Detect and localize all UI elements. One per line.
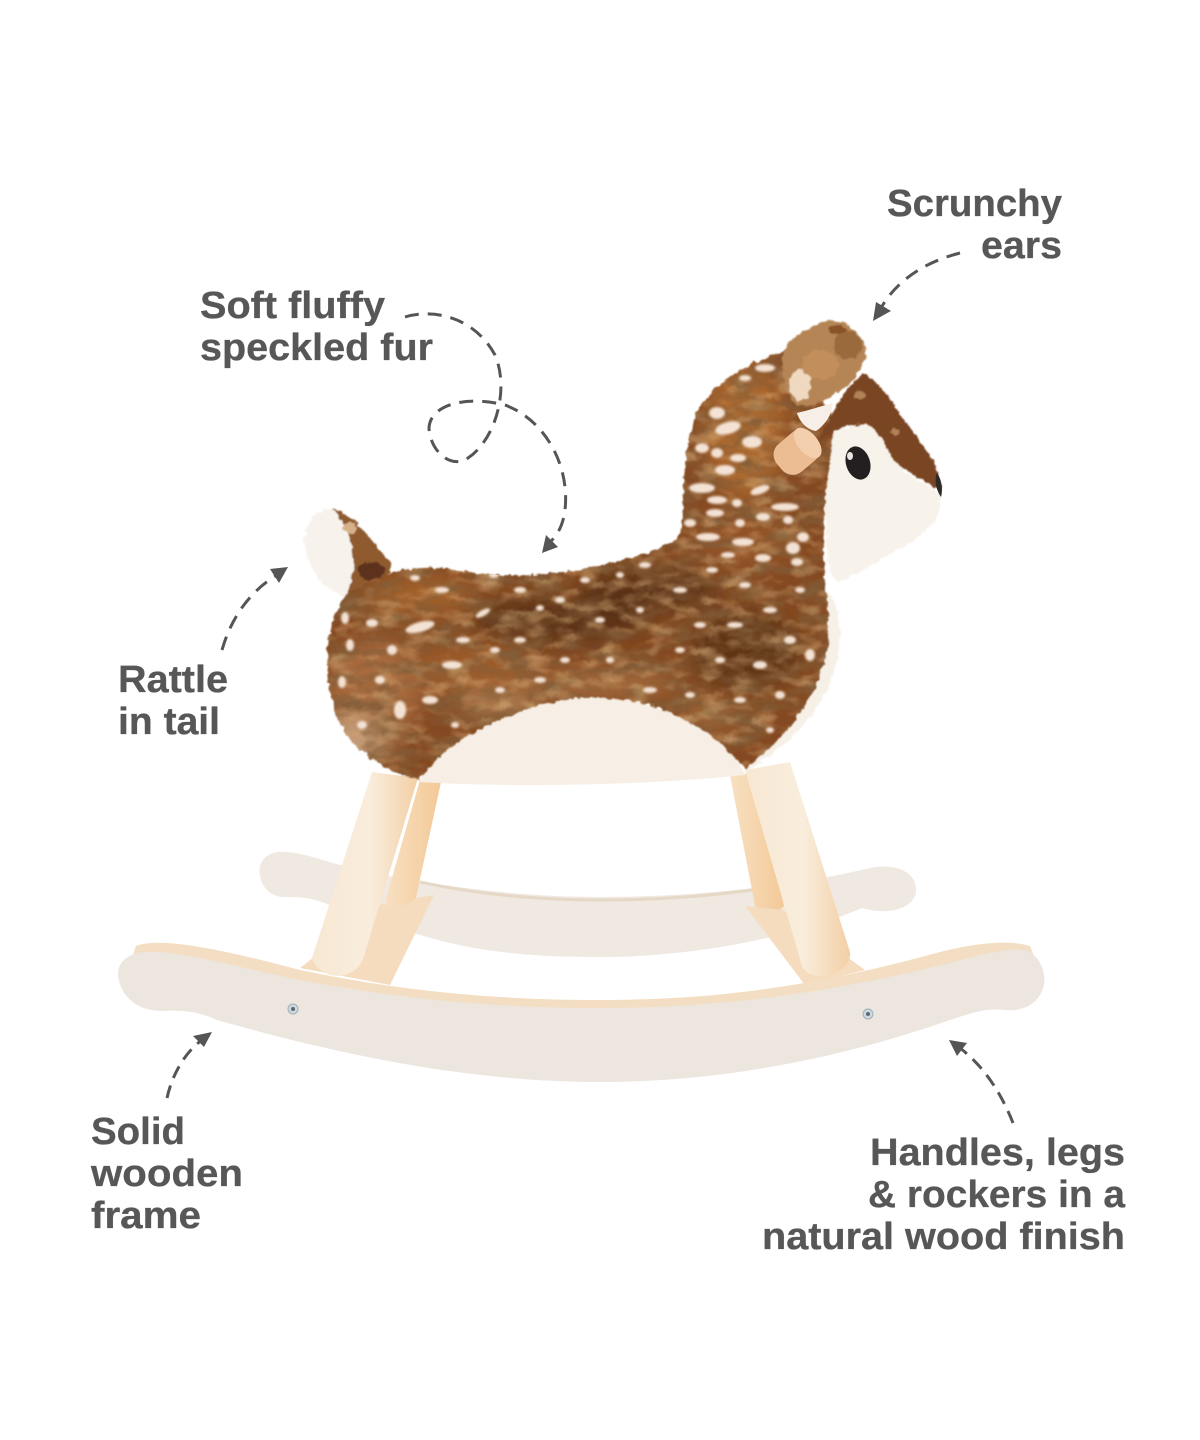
nose — [936, 473, 942, 497]
belly — [420, 697, 745, 785]
label: soft fluffy fur: Soft fluffy — [200, 285, 385, 327]
arrow: rattle in tail — [222, 567, 288, 650]
tail — [305, 509, 392, 597]
product: rocking deer — [118, 320, 1044, 1082]
arrow: handles legs rockers — [949, 1040, 1013, 1123]
label: solid wooden frame: Solid — [91, 1111, 185, 1153]
speckles — [338, 364, 815, 733]
label: scrunchy ears — [887, 183, 1062, 267]
inner ear white — [797, 403, 833, 431]
label: handles legs rockers — [762, 1132, 1126, 1258]
wooden handle — [768, 423, 827, 481]
deer head — [768, 320, 942, 497]
mottling — [310, 360, 800, 765]
ear — [783, 320, 867, 405]
back legs — [385, 773, 784, 912]
label: solid wooden frame: wooden — [90, 1153, 243, 1195]
label: soft fluffy fur — [200, 285, 433, 369]
fur streaks — [320, 340, 840, 790]
label: solid wooden frame: frame — [91, 1195, 201, 1237]
front legs — [312, 762, 850, 976]
cross braces — [300, 895, 865, 985]
arrow: soft fluffy fur — [405, 314, 566, 553]
white chest and muzzle — [735, 424, 941, 772]
infographic — [90, 188, 1126, 1250]
fur body and neck — [310, 340, 840, 790]
label: rattle in tail — [118, 659, 228, 743]
label: handles legs rockers: natural wood finish — [762, 1216, 1125, 1258]
screws — [288, 1004, 873, 1019]
label: rattle in tail: Rattle — [118, 659, 228, 701]
label: soft fluffy fur: speckled fur — [200, 327, 433, 369]
label: scrunchy ears: ears — [981, 225, 1062, 267]
back rocker — [260, 852, 916, 957]
label: rattle in tail: in tail — [118, 701, 220, 743]
label: handles legs rockers: Handles, legs — [870, 1132, 1125, 1174]
forehead and nose fur — [818, 373, 941, 490]
label: scrunchy ears: Scrunchy — [887, 183, 1062, 225]
arrow: solid wooden frame — [167, 1032, 212, 1098]
arrow: scrunchy ears — [873, 253, 960, 321]
label: solid wooden frame — [90, 1111, 243, 1237]
front rocker — [118, 943, 1044, 1082]
label: handles legs rockers: & rockers in a — [868, 1174, 1126, 1216]
eye — [841, 443, 875, 483]
